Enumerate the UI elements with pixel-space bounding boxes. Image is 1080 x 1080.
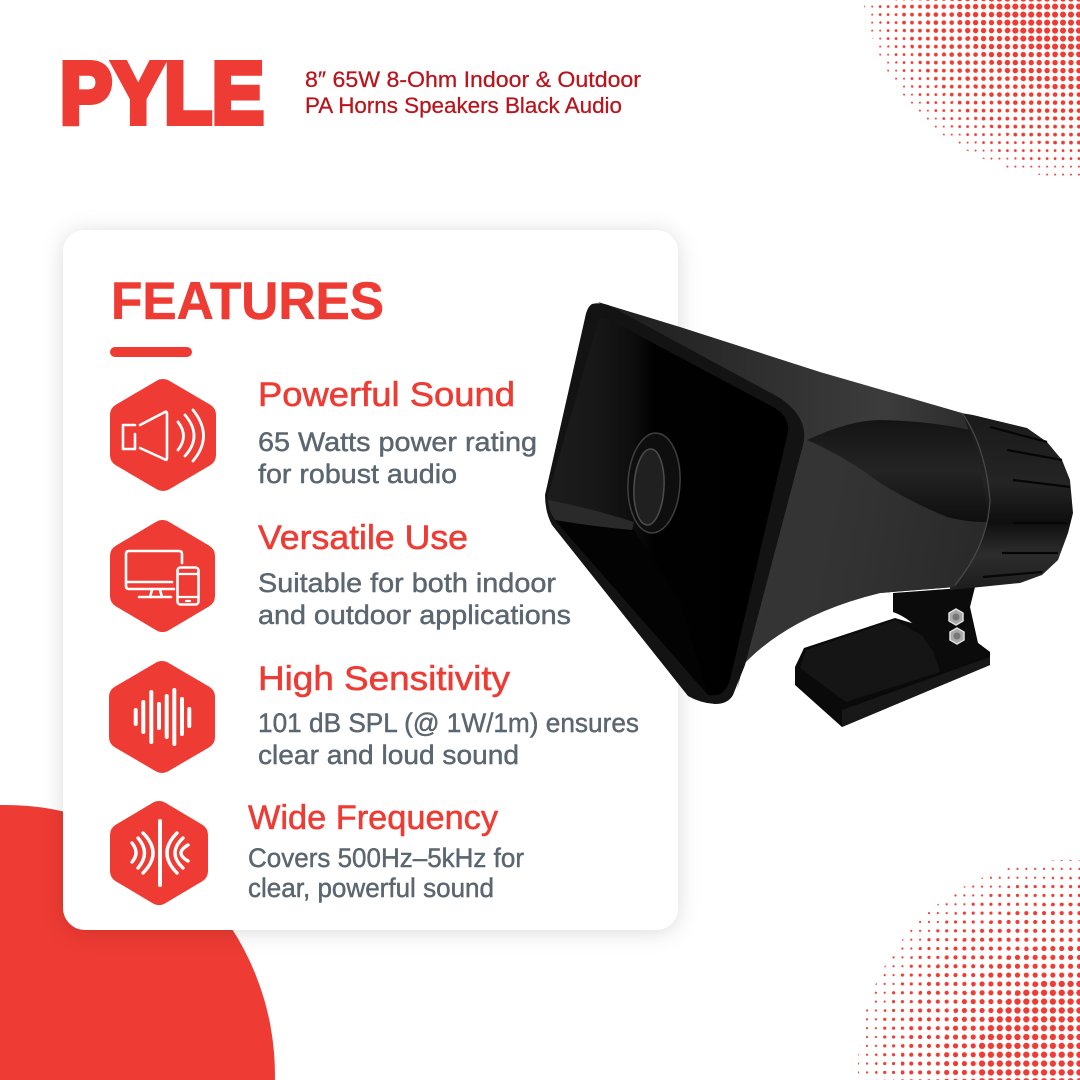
- text: high sensitivity: [258, 660, 639, 770]
- mouth reflection: [548, 500, 634, 530]
- header subtitle: 8″ 65W 8-Ohm Indoor & Outdoor: [305, 67, 641, 92]
- collar seam: [955, 413, 990, 585]
- body dark band: [807, 420, 987, 522]
- text: wide frequency: clear, powerful sound: [248, 873, 494, 903]
- icon: sound wave: [121, 673, 203, 761]
- red quarter circle: [0, 805, 275, 1080]
- feature: powerful sound: [122, 376, 537, 489]
- bracket: [893, 587, 990, 672]
- horn body: [598, 302, 979, 690]
- text: versatile use: [258, 519, 571, 630]
- logo: PYLE: PYLE: [60, 45, 264, 142]
- text: powerful sound: 65 Watts power rating: [258, 427, 537, 457]
- body lower panel: [737, 440, 987, 690]
- feature: wide frequency: [122, 799, 524, 903]
- text: wide frequency: [248, 799, 524, 903]
- text: high sensitivity: High Sensitivity: [258, 660, 510, 698]
- text: wide frequency: Covers 500Hz–5kHz for: [248, 843, 524, 873]
- text: powerful sound: for robust audio: [258, 459, 457, 489]
- ribbed rear cap: [950, 412, 1073, 590]
- header subtitle: PA Horns Speakers Black Audio: [305, 93, 622, 118]
- heading: features: FEATURES: [111, 272, 384, 331]
- icon: monitor and phone: [122, 532, 203, 620]
- halftone dots: bottom right: [856, 858, 1080, 1080]
- mounting base: [795, 618, 990, 727]
- text: wide frequency: Wide Frequency: [248, 799, 498, 837]
- halftone dots: top right: [860, 0, 1080, 178]
- icon: frequency: [122, 813, 196, 893]
- panel: features card: [63, 230, 678, 930]
- product: PA horn speaker: [545, 302, 1073, 727]
- header subtitle: [305, 67, 641, 118]
- bolts: [949, 609, 964, 644]
- heading underline: [110, 347, 192, 357]
- text: versatile use: and outdoor applications: [258, 600, 571, 630]
- text: high sensitivity: 101 dB SPL (@ 1W/1m) ensures: [258, 708, 639, 738]
- text: versatile use: Suitable for both indoor: [258, 568, 556, 598]
- text: powerful sound: Powerful Sound: [258, 376, 515, 414]
- icon: speaker: [122, 391, 204, 479]
- horn mouth rim: [545, 303, 804, 704]
- mouth lower facet: [552, 517, 708, 695]
- text: high sensitivity: clear and loud sound: [258, 740, 519, 770]
- text: versatile use: Versatile Use: [258, 519, 468, 557]
- horn mouth interior: [548, 318, 788, 695]
- horn centre driver: [625, 432, 683, 534]
- feature: high sensitivity: [121, 660, 639, 770]
- text: powerful sound: [258, 376, 537, 489]
- feature: versatile use: [122, 519, 571, 630]
